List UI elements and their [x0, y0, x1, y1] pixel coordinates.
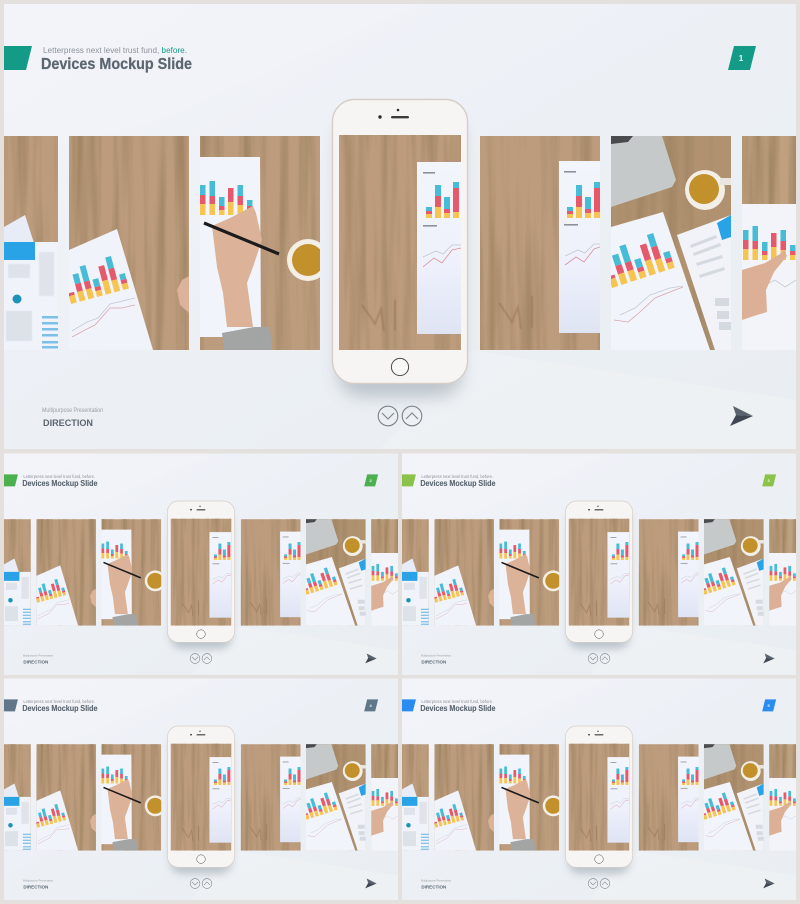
- footer label: DIRECTION: [23, 659, 49, 664]
- footer caption: Multipurpose Presentation: [42, 407, 103, 414]
- title: Devices Mockup Slide: [420, 704, 496, 713]
- accent tab: [4, 699, 18, 711]
- footer caption: Multipurpose Presentation: [421, 878, 451, 882]
- navigation controls: [190, 653, 377, 663]
- footer label: DIRECTION: [421, 884, 447, 889]
- photo strip with phone: [4, 501, 398, 649]
- subtitle: Letterpress next level trust fund, before.: [23, 699, 95, 704]
- navigation controls: [378, 406, 753, 426]
- footer label: DIRECTION: [43, 417, 93, 428]
- accent tab: [4, 46, 32, 70]
- page badge: 4: [370, 703, 373, 708]
- title: Devices Mockup Slide: [41, 56, 192, 73]
- photo strip with phone: [402, 726, 796, 874]
- accent tab: [4, 474, 18, 486]
- page badge: 3: [768, 478, 771, 483]
- subtitle: Letterpress next level trust fund, before.: [43, 45, 187, 55]
- page badge: [762, 699, 776, 711]
- navigation controls: [588, 878, 775, 888]
- photo strip with phone: [4, 726, 398, 874]
- page badge: [364, 474, 378, 486]
- panel: small slide slate: [4, 678, 398, 900]
- footer caption: Multipurpose Presentation: [421, 653, 451, 657]
- subtitle: Letterpress next level trust fund, before.: [23, 474, 95, 479]
- page badge: 5: [768, 703, 771, 708]
- footer label: DIRECTION: [421, 659, 447, 664]
- icon: chevron down button: [378, 406, 398, 426]
- title: Devices Mockup Slide: [22, 479, 98, 488]
- phone shadow: [338, 115, 462, 397]
- page badge: [364, 699, 378, 711]
- panel: small slide green: [4, 453, 398, 675]
- photo: finger on chart: [742, 136, 796, 350]
- photo strip with phone: [402, 501, 796, 649]
- icon: chevron up button: [402, 406, 422, 426]
- accent tab: [402, 699, 416, 711]
- slide background: [4, 453, 398, 675]
- accent tab: [402, 474, 416, 486]
- page badge: 2: [370, 478, 373, 483]
- footer label: DIRECTION: [23, 884, 49, 889]
- footer caption: Multipurpose Presentation: [23, 653, 53, 657]
- phone screen: [339, 135, 461, 350]
- page badge: [762, 474, 776, 486]
- photo: laptop, coffee and reports: [600, 136, 732, 350]
- phone mockup: [332, 100, 468, 384]
- navigation controls: [588, 653, 775, 663]
- icon: paper plane arrow: [730, 406, 753, 426]
- panel: small slide lime: [402, 453, 796, 675]
- subtitle: Letterpress next level trust fund, before.: [421, 699, 493, 704]
- photo strip with phone: [4, 100, 796, 397]
- panel: small slide blue: [402, 678, 796, 900]
- photo: wood with chart sheet: [480, 136, 600, 350]
- panel: main slide: [4, 4, 796, 449]
- subtitle: Letterpress next level trust fund, before.: [421, 474, 493, 479]
- title: Devices Mockup Slide: [420, 479, 496, 488]
- footer caption: Multipurpose Presentation: [23, 878, 53, 882]
- slide background: [4, 678, 398, 900]
- slide background: [402, 453, 796, 675]
- slide background: [4, 4, 796, 449]
- title: Devices Mockup Slide: [22, 704, 98, 713]
- photo: hand drawing on chart: [200, 136, 329, 350]
- page badge: 1: [739, 54, 744, 63]
- photo: documents on desk: [4, 136, 58, 350]
- photo: chart sheet on wood: [62, 136, 189, 350]
- navigation controls: [190, 878, 377, 888]
- slide background: [402, 678, 796, 900]
- page badge: [728, 46, 756, 70]
